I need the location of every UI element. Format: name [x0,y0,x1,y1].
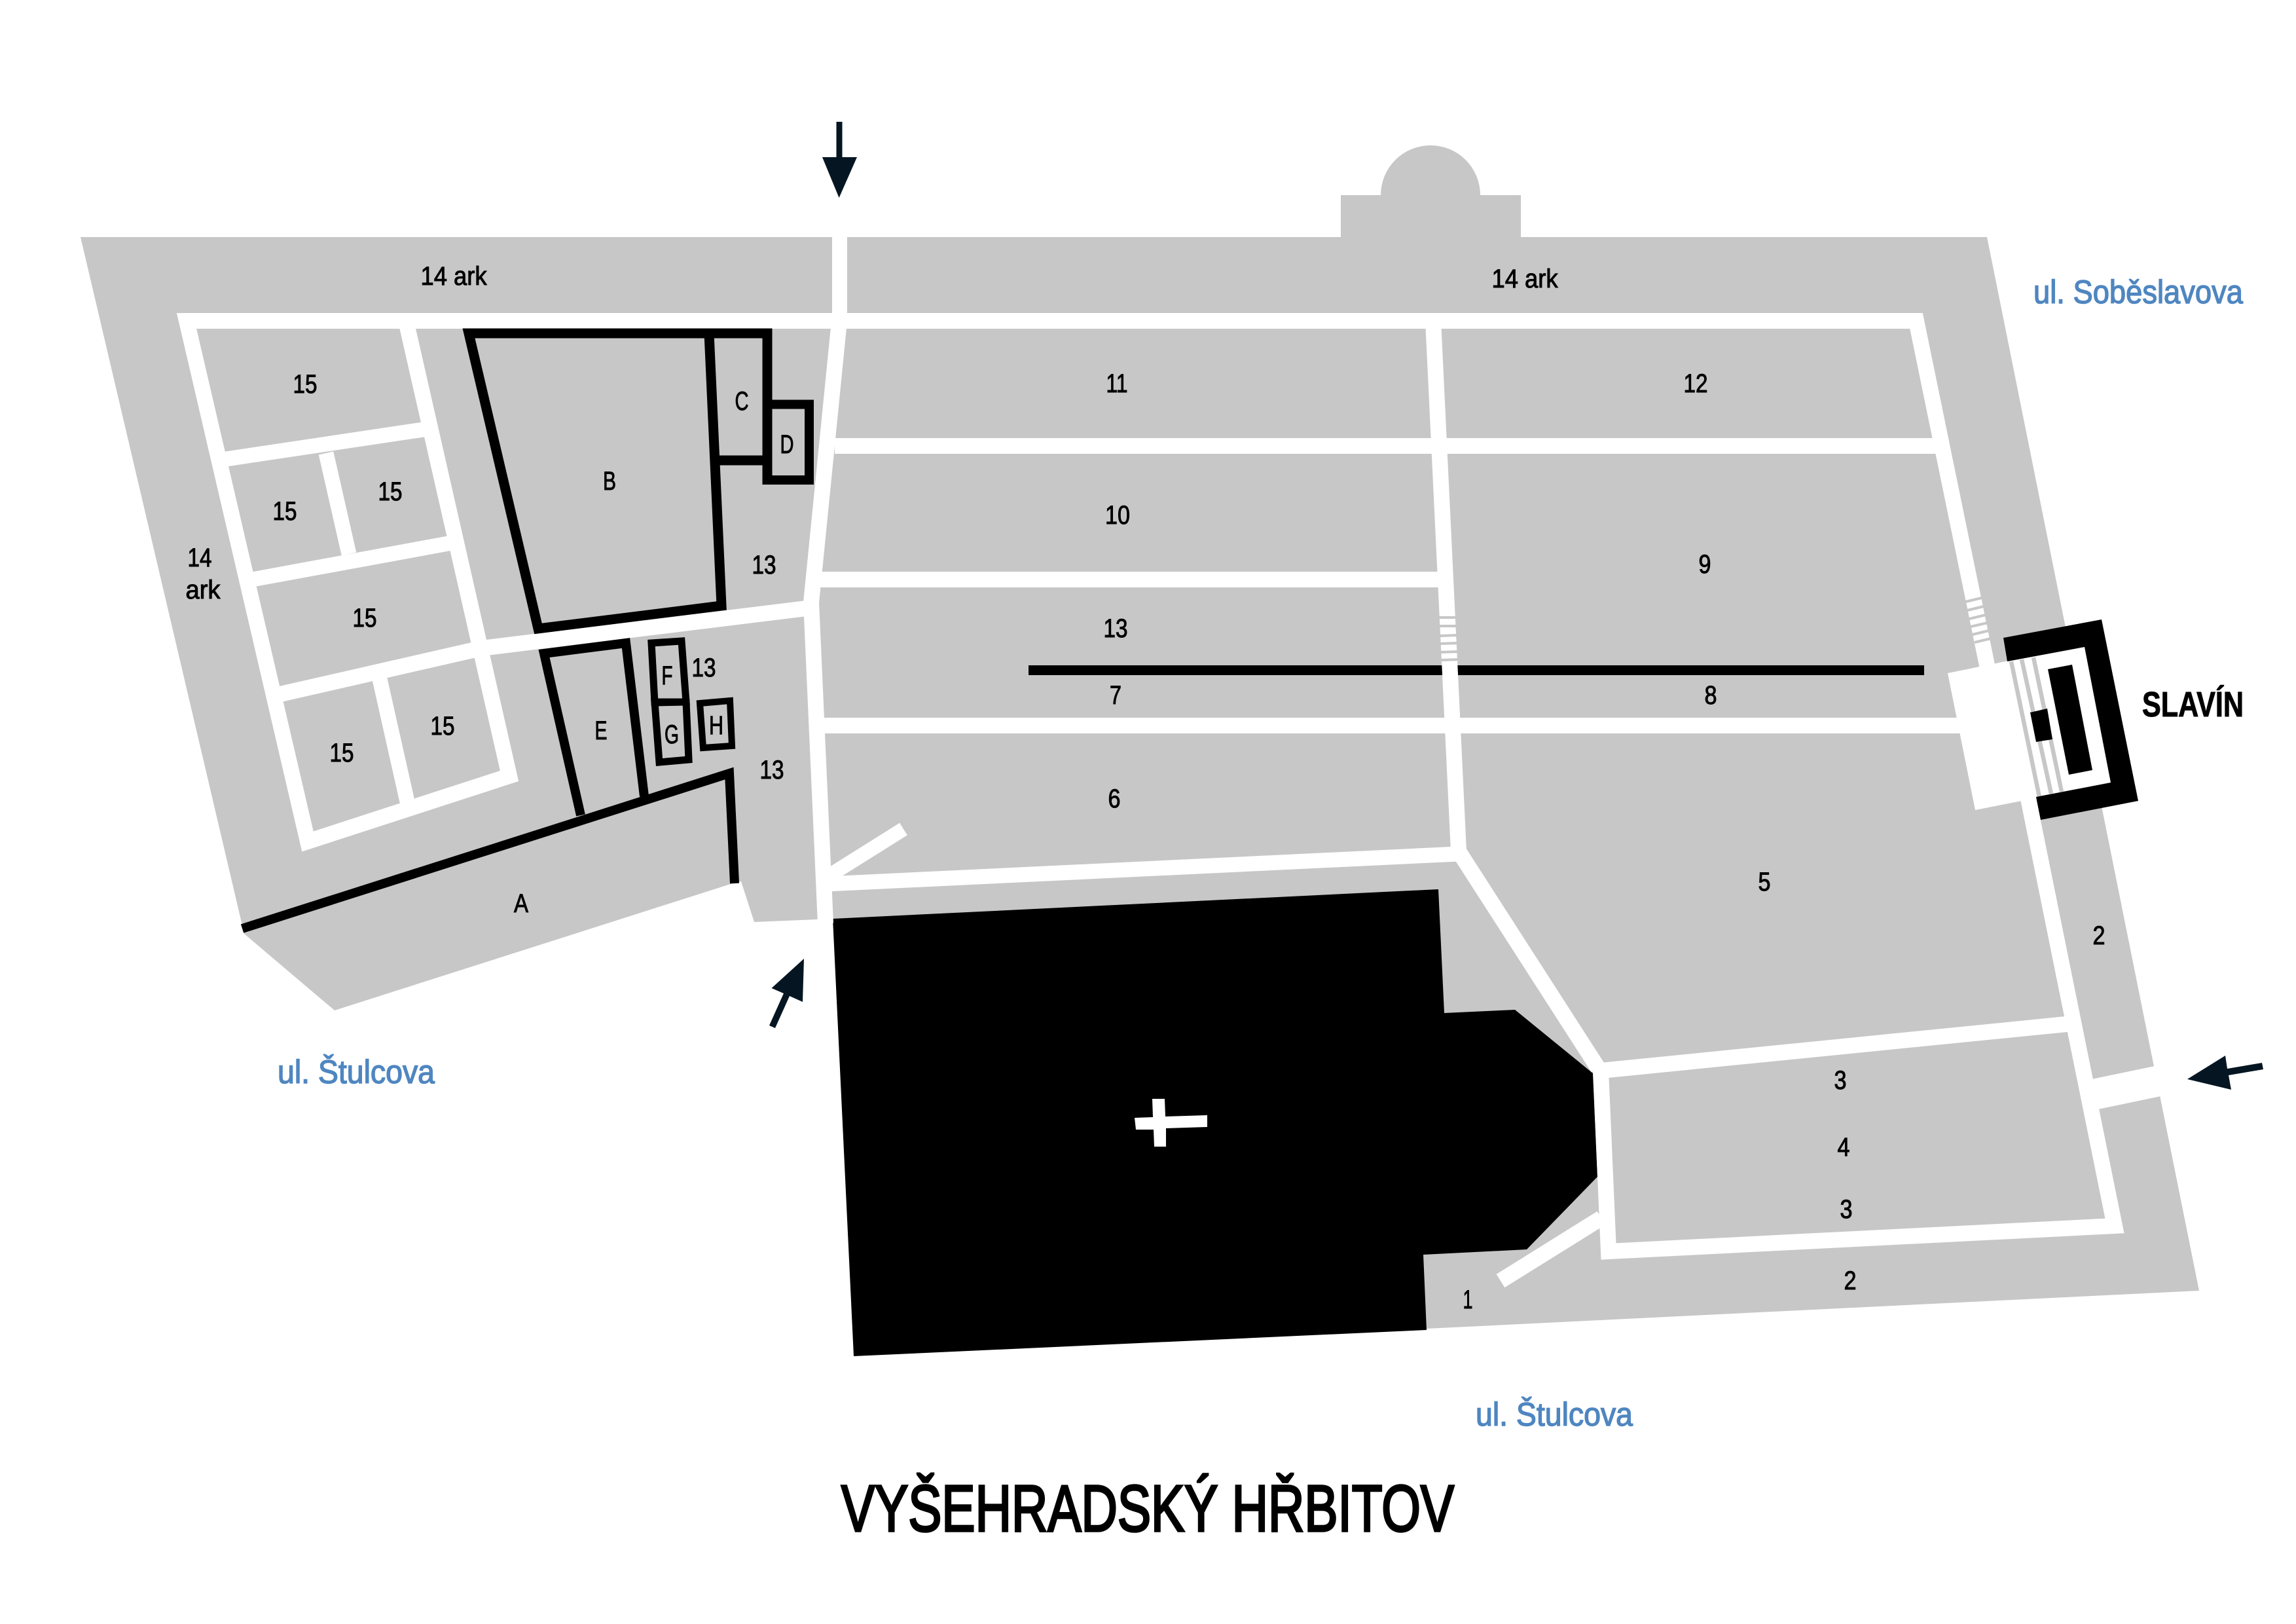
section number labels: 7 [1110,681,1121,710]
section number labels: 11 [1106,369,1127,398]
section number labels: D [780,430,793,459]
section number labels: E [594,716,608,745]
steps on the central path [1439,618,1460,660]
street label: Soběslavova: ul. Soběslavova [2033,274,2243,310]
section number labels: 14 [187,544,212,572]
section number labels: 3 [1840,1195,1853,1224]
street label: Štulcova west: ul. Štulcova [278,1054,435,1090]
section number labels: 6 [1108,784,1121,813]
section number labels: 15 [272,497,297,526]
section number labels: 15 [330,739,354,767]
section number labels: 9 [1698,550,1711,579]
section number labels: 15 [352,604,377,633]
arrow: west entrance [769,959,804,1028]
section G outline [655,702,689,762]
plaza in front of Slavín [1948,661,2037,810]
section number labels: F [661,661,673,690]
section number labels: 15 [293,370,317,399]
steps towards Slavín [1965,598,1991,642]
icon: white cross on church [1135,1099,1207,1147]
section number labels: B [603,467,616,496]
street label: Štulcova south: ul. Štulcova [1476,1396,1633,1433]
section number labels: 15 [378,477,402,506]
section number labels: G [665,720,679,749]
arrow: east entrance [2187,1056,2263,1090]
section number labels: 13 [1104,614,1127,643]
section H outline [700,701,732,748]
section F outline [651,641,686,703]
section number labels: 2 [1844,1266,1857,1295]
section number labels: A [514,889,528,918]
section D outline [767,405,809,480]
section number labels: H [709,711,723,740]
section number labels: C [735,387,749,416]
paths: white road network [187,237,2167,1281]
section number labels: 2 [2092,921,2105,950]
section A outline [242,773,735,929]
title: VYŠEHRADSKÝ HŘBITOV [841,1472,1454,1545]
arrow: north entrance [822,122,857,198]
section B and C outline [469,333,767,629]
section number labels: 13 [752,551,776,580]
panel: cemetery ground plan [81,145,2199,1336]
divider: black line between sections [1029,665,1924,675]
section number labels: 13 [691,654,716,682]
building: Slavín memorial [2003,619,2138,820]
label: SLAVÍN: SLAVÍN [2142,685,2244,724]
section number labels: 12 [1684,369,1707,398]
section number labels: 10 [1105,501,1130,530]
section number labels [186,262,2105,1314]
section number labels: 8 [1705,681,1717,710]
section number labels: 14 ark [420,262,487,291]
section number labels: ark [186,576,221,604]
section number labels: 3 [1834,1066,1846,1095]
section number labels: 15 [431,712,454,741]
section number labels: 1 [1463,1285,1473,1314]
section number labels: 5 [1758,868,1770,896]
section number labels: 14 ark [1491,265,1558,293]
section E outline [544,643,644,815]
section number labels: 13 [759,756,784,784]
building: church [833,889,1597,1356]
section number labels: 4 [1837,1133,1850,1162]
